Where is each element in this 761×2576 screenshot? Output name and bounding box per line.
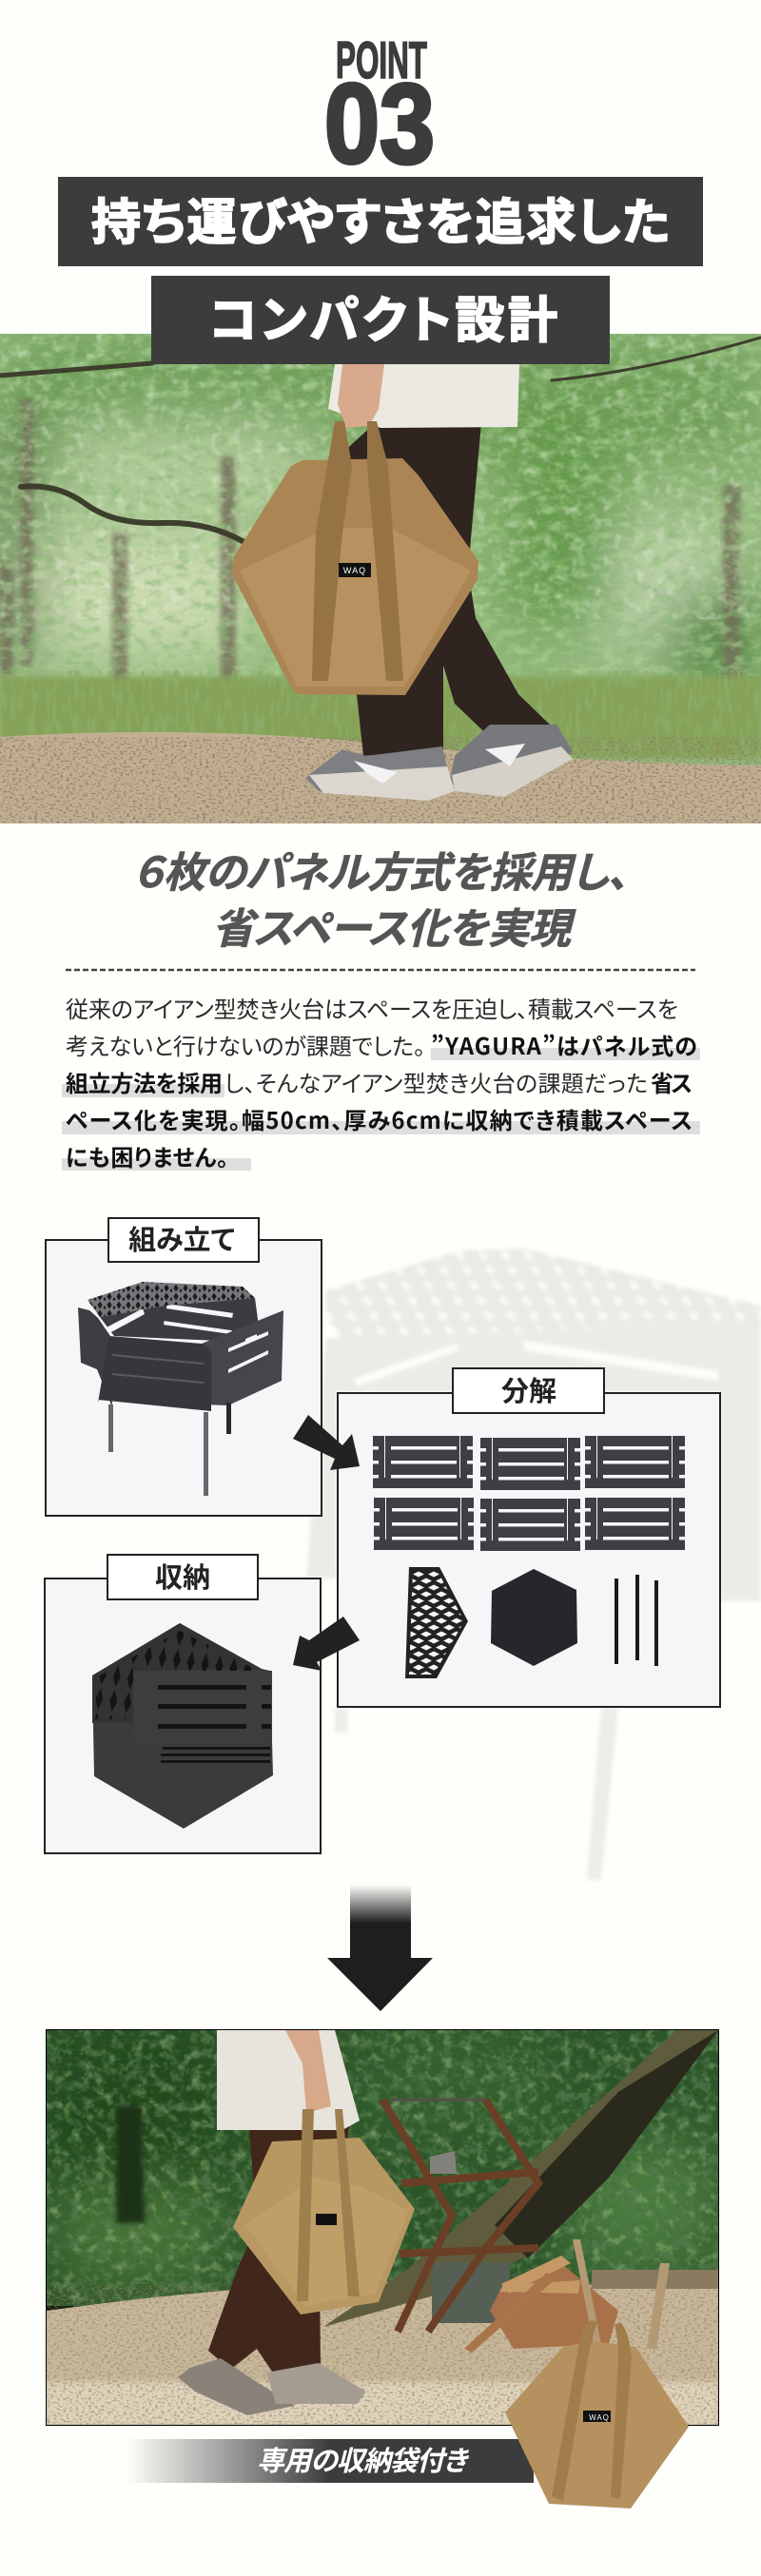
tree trunk — [116, 2105, 146, 2223]
body text with highlights: 考えないと行けないのが課題でした。 — [66, 1028, 425, 1061]
trousers — [339, 423, 550, 756]
hand and arm — [338, 364, 384, 428]
body text with highlights: 従来のアイアン型焚き火台はスペースを圧迫し、積載スペースを — [66, 991, 678, 1024]
label — [453, 1368, 604, 1413]
storage box — [432, 2262, 510, 2323]
section heading: 省スペース化を実現 — [212, 895, 576, 956]
caption bar — [127, 2439, 534, 2483]
label: 分解 — [501, 1369, 556, 1409]
shoes — [178, 2358, 366, 2415]
panel: disassembled — [338, 1368, 720, 1707]
kettle — [430, 2151, 457, 2174]
far log — [592, 2270, 718, 2289]
gravel path — [0, 732, 761, 823]
branches — [0, 338, 761, 544]
grass — [0, 670, 761, 758]
six wall panels — [373, 1436, 685, 1551]
photo: person carrying hexagonal bag in forest — [0, 334, 761, 823]
product bag cut-out: WAQ — [589, 2413, 610, 2422]
hexagonal tote bag: WAQ — [343, 566, 366, 575]
hexagonal tote bag — [232, 421, 478, 695]
faded background fire pit watermark — [306, 1249, 761, 1880]
heading: POINT 03: 03 — [324, 61, 435, 187]
t-shirt — [328, 364, 519, 428]
caption bar: 専用の収納袋付き — [257, 2439, 469, 2479]
body text with highlights: ペース化を実現。幅50cm、厚み6cmに収納でき積載スペース — [66, 1102, 693, 1135]
three legs — [615, 1575, 658, 1666]
body text with highlights: 組立方法を採用 — [66, 1065, 223, 1098]
title banner line 2: コンパクト設計 — [209, 281, 557, 352]
trousers — [208, 2119, 350, 2377]
stacked hexagon — [92, 1623, 273, 1829]
t-shirt — [217, 2030, 360, 2130]
shoes — [305, 725, 573, 801]
mesh grate — [405, 1567, 468, 1678]
arrow: assembled to disassembled — [293, 1415, 360, 1470]
tree trunks — [0, 399, 740, 713]
label: 組み立て — [128, 1218, 235, 1258]
body text with highlights: 省ス — [651, 1065, 693, 1098]
label: 収納 — [155, 1556, 210, 1596]
heading: POINT 03: POINT — [336, 30, 427, 89]
title banner line 1: 持ち運びやすさを追求した — [91, 183, 670, 254]
arrow: disassembled to stored — [293, 1617, 360, 1671]
tongs and hatchet — [573, 2239, 670, 2349]
wood shelf — [382, 2100, 538, 2332]
photo: camp scene with bag — [46, 2029, 719, 2426]
section heading — [132, 839, 630, 956]
panel: stored — [45, 1555, 321, 1853]
ground — [47, 2281, 718, 2426]
body text with highlights: ”YAGURA”はパネル式の — [431, 1028, 697, 1061]
label — [107, 1555, 258, 1599]
panel: assembled — [46, 1218, 322, 1516]
body text with highlights: にも困りません。 — [66, 1139, 228, 1172]
section heading: ６枚のパネル方式を採用し、 — [132, 839, 630, 900]
arm — [285, 2030, 331, 2113]
large down arrow — [327, 1885, 433, 2011]
firewood pile — [464, 2256, 618, 2353]
body text with highlights: し、そんなアイアン型焚き火台の課題だった — [224, 1065, 648, 1098]
body text with highlights — [62, 991, 700, 1172]
title banner line 2 — [151, 276, 610, 364]
hexagon base plate — [491, 1569, 577, 1666]
tote bag — [233, 2109, 415, 2315]
label — [108, 1218, 259, 1262]
tent — [323, 2030, 718, 2327]
fire pit illustration — [78, 1282, 283, 1496]
product bag cut-out — [505, 2320, 689, 2508]
